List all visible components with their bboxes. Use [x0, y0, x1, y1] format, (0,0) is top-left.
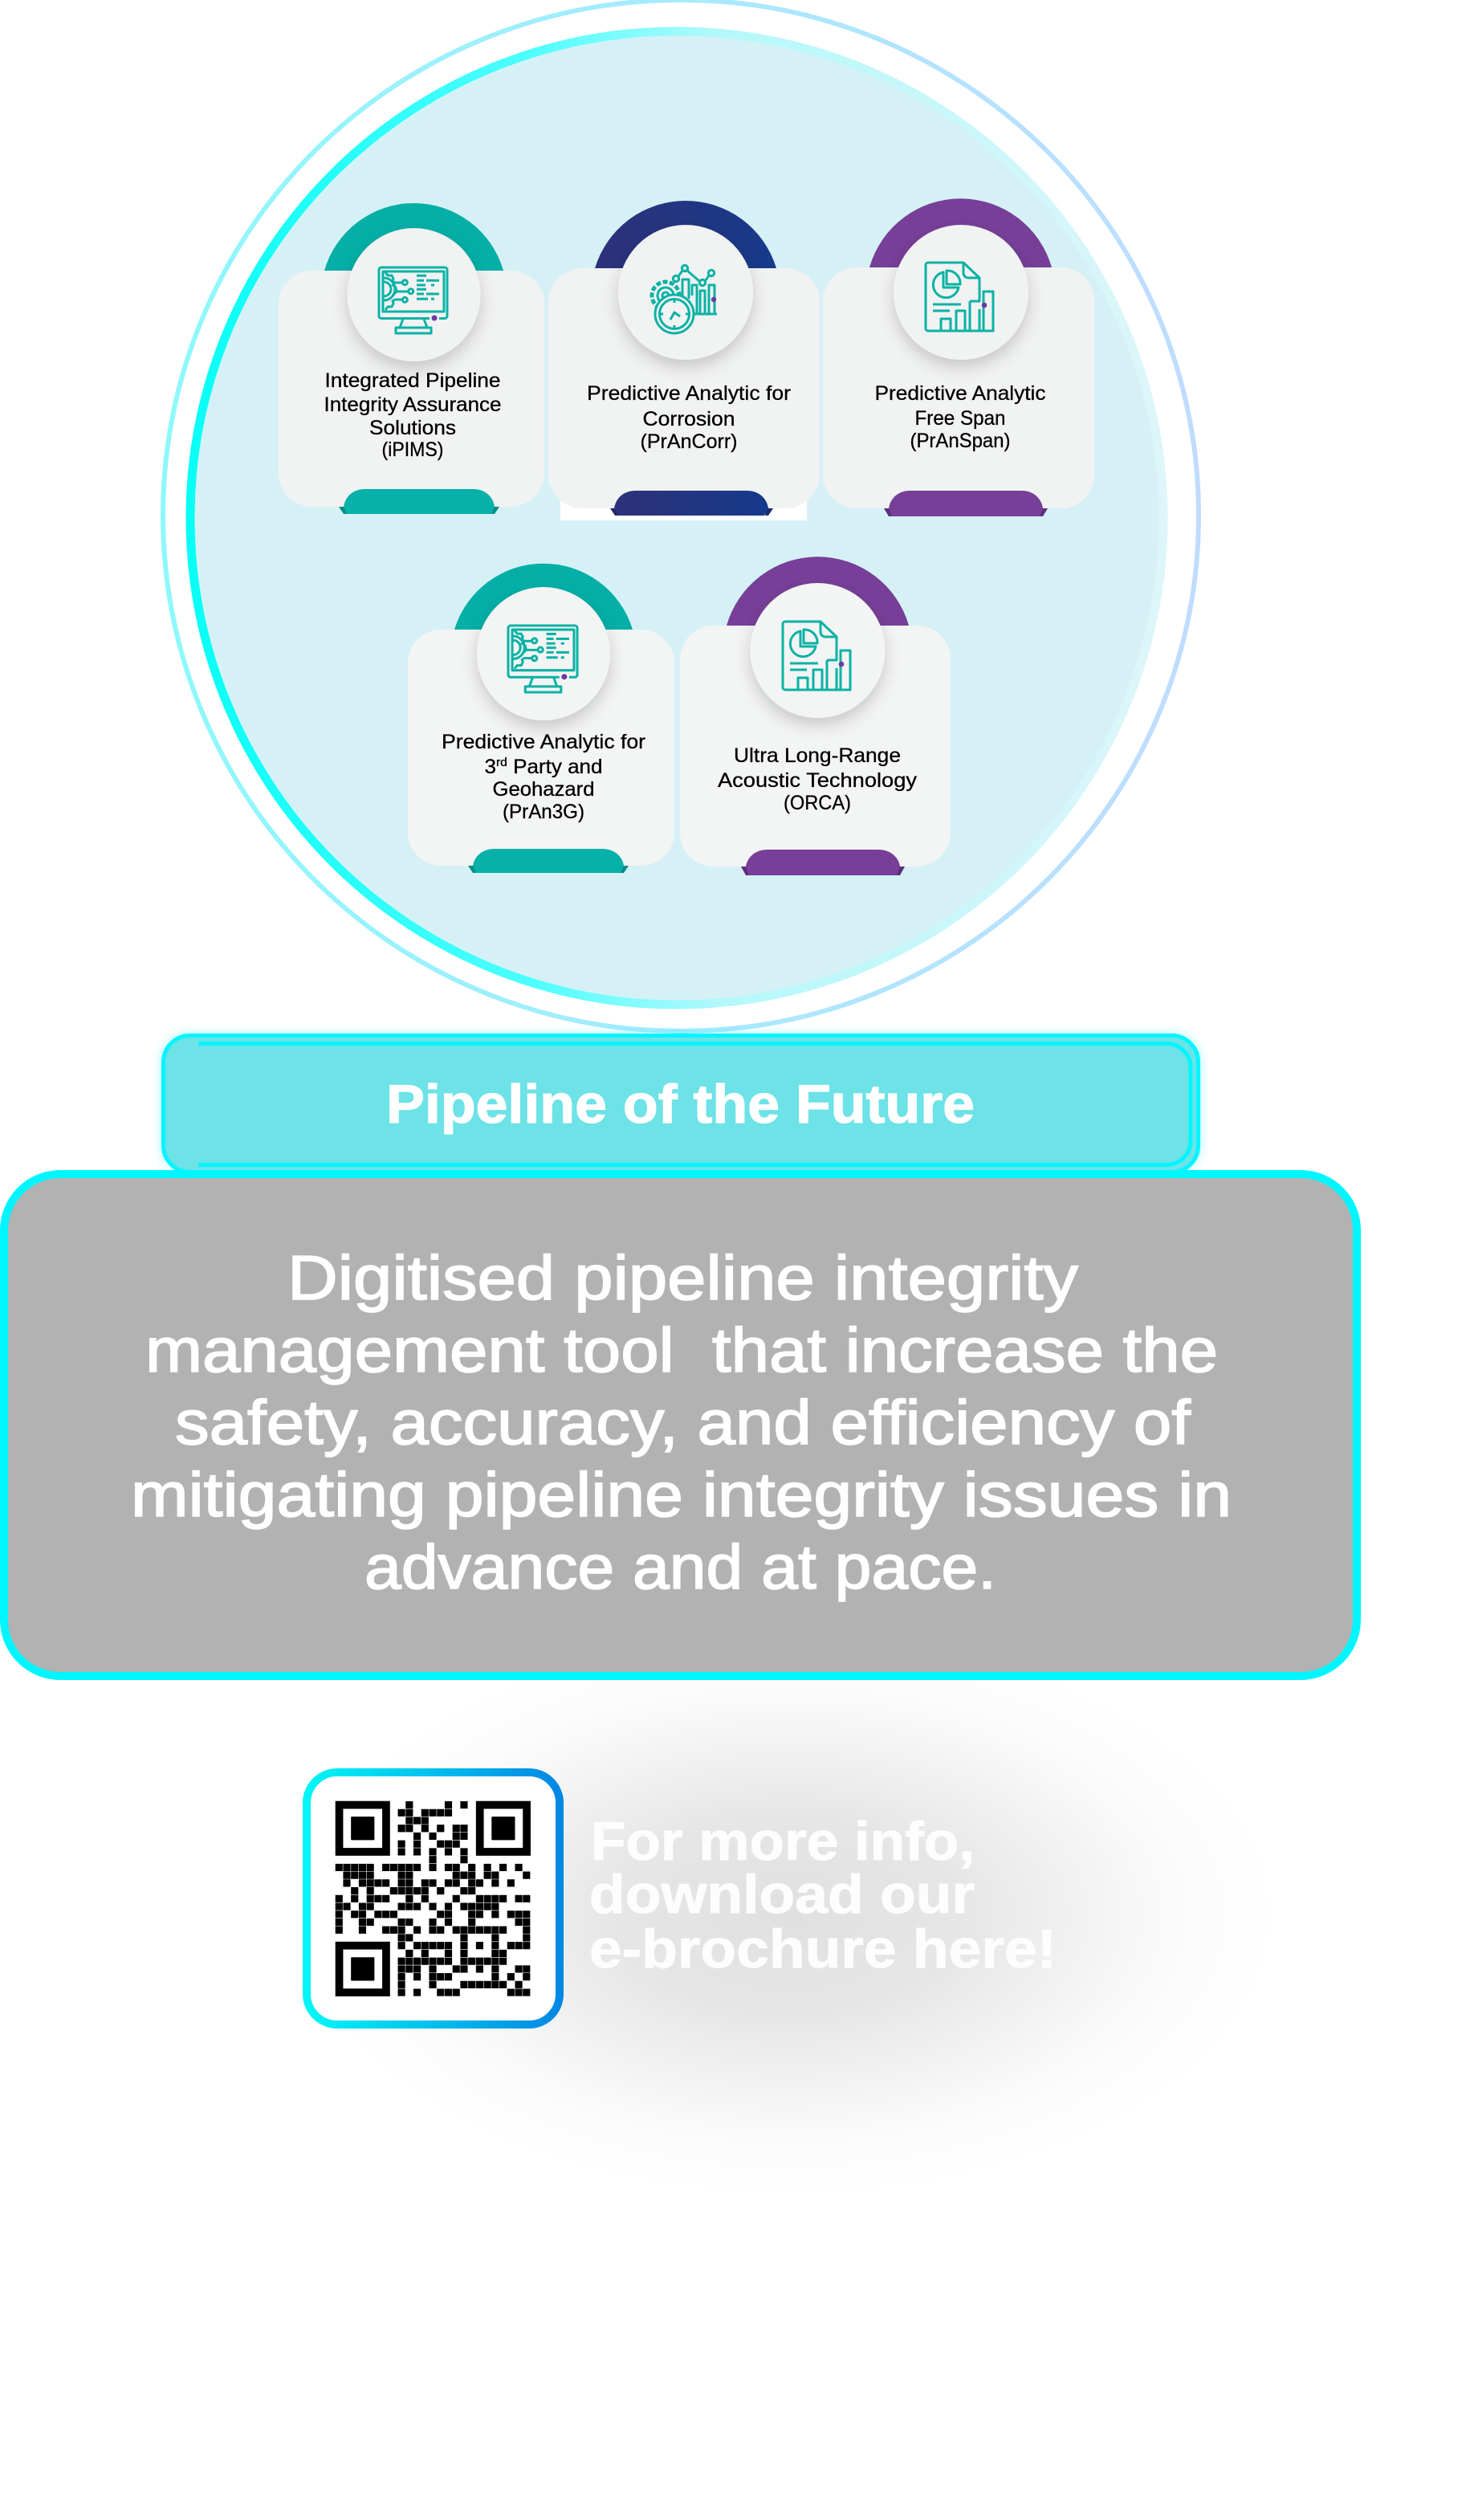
label	[442, 731, 645, 823]
label: (PrAnSpan)	[910, 430, 1010, 452]
panel: PrAnCorr card	[548, 201, 820, 516]
description text: mitigating pipeline integrity issues in	[131, 1459, 1232, 1530]
card body	[548, 268, 820, 508]
label: Predictive Analytic for	[442, 731, 645, 753]
label: Party and	[507, 756, 602, 778]
banner box	[164, 1036, 1198, 1172]
label	[587, 382, 791, 453]
bottom tab	[884, 491, 1048, 516]
label	[324, 369, 501, 461]
bottom tab	[468, 849, 629, 873]
label	[875, 382, 1045, 452]
outer ring	[163, 0, 1199, 1031]
banner title: Pipeline of the Future	[386, 1074, 975, 1135]
icon: gear, clock and chart	[652, 265, 717, 333]
card body	[279, 271, 544, 507]
inner disc	[190, 31, 1163, 1005]
label: Geohazard	[493, 778, 594, 801]
card body	[408, 630, 674, 866]
white patch behind PrAnCorr card	[560, 482, 807, 520]
QR code	[336, 1805, 530, 1992]
card body	[680, 626, 951, 867]
label: (PrAnCorr)	[641, 430, 737, 453]
call to action text: e-brochure here!	[589, 1919, 1057, 1980]
label	[718, 744, 918, 814]
bottom tab	[610, 491, 773, 516]
icon circle	[894, 225, 1028, 360]
description text: management tool that increase the	[145, 1315, 1218, 1385]
QR frame	[307, 1772, 560, 2025]
call to action text: For more info,	[591, 1811, 975, 1872]
icon circle	[347, 228, 480, 361]
arch	[727, 557, 909, 626]
bottom tab	[741, 850, 905, 875]
icon: report document	[926, 263, 993, 331]
label: (iPIMS)	[382, 438, 443, 461]
grey description panel	[4, 1174, 1357, 1676]
panel: ORCA card	[680, 557, 951, 875]
description text: Digitised pipeline integrity	[287, 1242, 1078, 1313]
panel: PrAn3G card	[408, 564, 674, 873]
call to action text	[589, 1811, 1057, 1980]
label: Predictive Analytic	[875, 382, 1045, 405]
arch	[595, 201, 776, 268]
description text	[131, 1242, 1232, 1602]
arch	[324, 203, 503, 271]
status dot	[711, 297, 716, 302]
icon circle	[750, 583, 885, 718]
label: rd	[496, 756, 507, 769]
arch	[454, 564, 633, 630]
card body	[823, 267, 1094, 508]
inner lines	[198, 1044, 1191, 1164]
icon circle	[477, 587, 610, 720]
call to action text: download our	[589, 1864, 975, 1925]
icon: monitor	[508, 626, 577, 692]
description text: safety, accuracy, and efficiency of	[175, 1387, 1191, 1458]
panel: iPIMS card	[279, 203, 544, 514]
label: Corrosion	[642, 408, 735, 430]
panel box	[4, 1174, 1357, 1676]
description text: advance and at pace.	[364, 1531, 996, 1602]
arch	[869, 198, 1052, 267]
label: Acoustic Technology	[718, 769, 918, 792]
label: Ultra Long-Range	[734, 744, 901, 767]
label: Free Span	[915, 407, 1005, 430]
label: 3	[485, 756, 495, 778]
bottom tab	[339, 489, 499, 514]
label: (PrAn3G)	[503, 801, 584, 823]
label: (ORCA)	[784, 792, 851, 814]
icon: report document	[783, 622, 850, 690]
panel: PrAnSpan card	[823, 198, 1094, 516]
label: Predictive Analytic for	[587, 382, 791, 405]
label: Integrity Assurance	[324, 393, 501, 416]
label: Integrated Pipeline	[324, 369, 501, 392]
icon circle	[618, 225, 753, 360]
soft grey glow	[298, 1634, 1277, 2196]
QR code card	[307, 1772, 560, 2025]
icon: monitor	[379, 267, 447, 333]
label: Solutions	[369, 417, 456, 439]
banner: Pipeline of the Future	[164, 1036, 1198, 1172]
